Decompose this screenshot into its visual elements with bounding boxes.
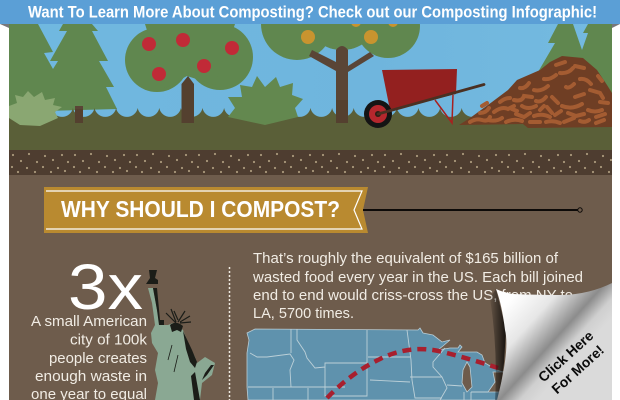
US map xyxy=(247,328,512,400)
orange tree xyxy=(261,0,420,123)
wheelbarrow xyxy=(364,69,484,128)
icon: statue of liberty xyxy=(146,270,215,400)
ground with scalloped horizon xyxy=(8,108,613,150)
paragraph: That’s roughly the equivalent of $165 billion of xyxy=(253,250,559,267)
click here label: For More! xyxy=(548,342,607,397)
stat description: enough waste in xyxy=(35,368,147,385)
paragraph: end to end would criss-cross the US, from NY to xyxy=(253,287,573,304)
page curl xyxy=(496,283,612,400)
big stat 3x: 3x xyxy=(68,251,143,323)
tree trunks over ground xyxy=(75,100,348,123)
curl shadow xyxy=(490,289,506,400)
brown panel background xyxy=(9,175,612,400)
right pine tree xyxy=(538,24,612,100)
stat description xyxy=(31,313,148,400)
sky xyxy=(9,24,612,119)
soil layer xyxy=(9,150,612,175)
left pine trees xyxy=(9,24,117,123)
section heading ribbon: WHY SHOULD I COMPOST? xyxy=(61,196,340,222)
dotted divider xyxy=(228,267,230,400)
paragraph: wasted food every year in the US. Each bill joined xyxy=(252,269,583,286)
stat description: people creates xyxy=(49,350,147,367)
section heading ribbon xyxy=(44,187,368,233)
stat description: A small American xyxy=(31,313,147,330)
banner fold shadows xyxy=(0,24,620,28)
dashed route arc xyxy=(327,349,498,398)
dark green bush xyxy=(228,76,303,125)
paragraph: LA, 5700 times. xyxy=(253,305,354,322)
stat description: city of 100k xyxy=(70,332,148,348)
compost pile xyxy=(459,56,612,128)
click here label: Click Here xyxy=(535,327,597,385)
light green bush xyxy=(9,91,62,126)
heading connector line xyxy=(363,208,582,212)
paragraph xyxy=(252,250,583,322)
apple tree xyxy=(125,24,253,123)
